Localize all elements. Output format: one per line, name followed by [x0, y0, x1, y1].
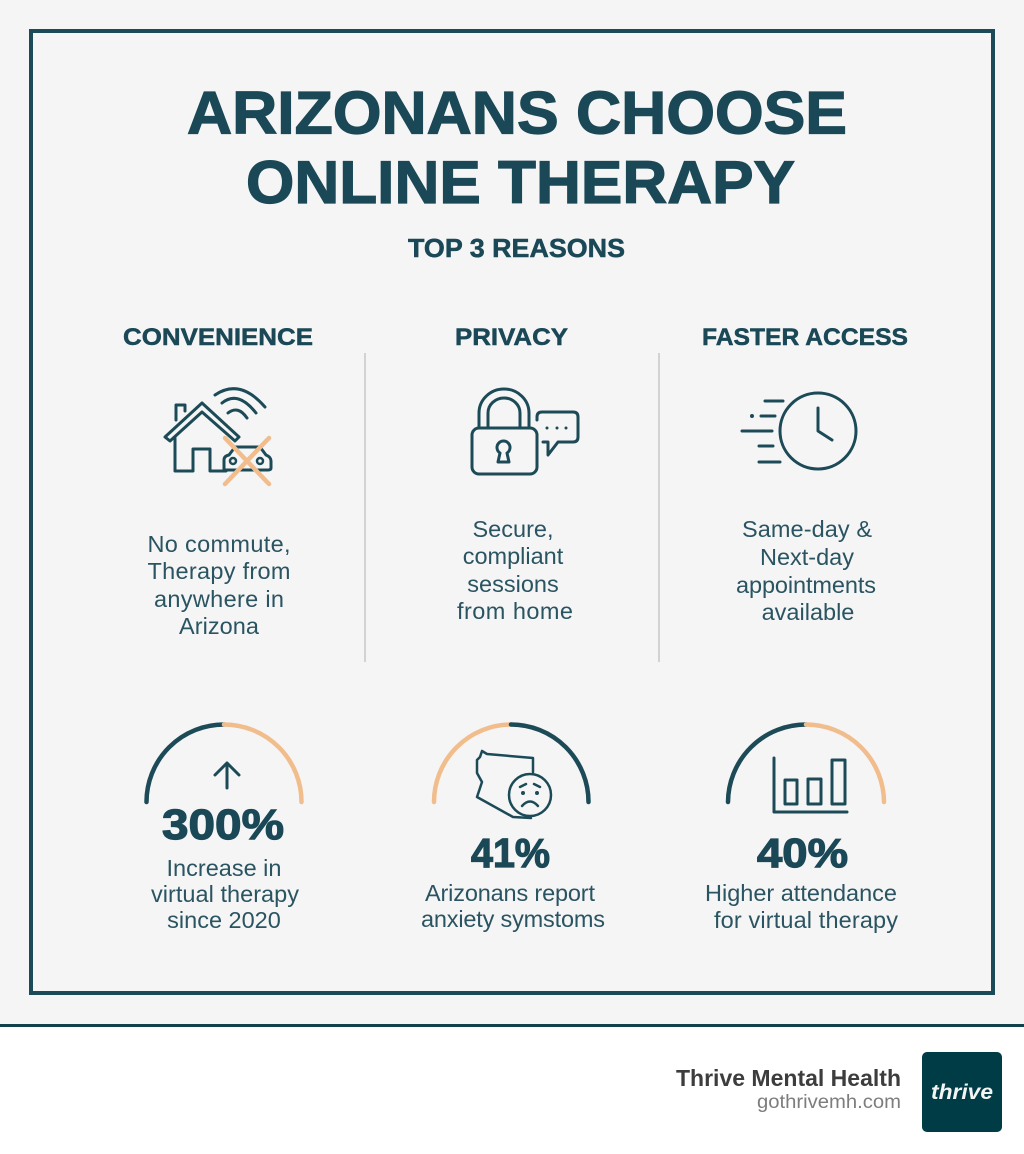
- title: [187, 80, 847, 216]
- text: privacy: from home: [457, 598, 573, 624]
- icon: bar chart: [774, 758, 847, 812]
- icon: Arizona map with sad face: [477, 751, 551, 818]
- text: 40%: [705, 880, 898, 933]
- text: convenience: Therapy from: [148, 558, 290, 584]
- footer brand text: gothrivemh.com: [757, 1092, 901, 1113]
- icon: padlock with speech bubble: [472, 389, 578, 474]
- subtitle: TOP 3 REASONS: [408, 233, 625, 263]
- panel: framed content: [31, 31, 993, 993]
- stat: 40%: [705, 724, 898, 933]
- text: 40%: Higher attendance: [705, 880, 897, 906]
- text: privacy: [457, 516, 573, 624]
- title: ARIZONANS CHOOSE: [187, 80, 847, 146]
- icon: up arrow: [215, 763, 239, 788]
- text: privacy: Secure,: [472, 516, 554, 542]
- text: faster access: available: [762, 599, 854, 625]
- panel: convenience: [123, 324, 313, 639]
- text: 41%: anxiety symstoms: [421, 906, 605, 932]
- value: 300%: 300%: [162, 801, 284, 849]
- icon: clock with speed lines: [742, 393, 856, 469]
- value: 41%: 41%: [471, 830, 550, 876]
- text: 40%: for virtual therapy: [714, 907, 898, 933]
- text: 300%: virtual therapy: [151, 881, 299, 907]
- text: convenience: [148, 531, 290, 639]
- text: faster access: appointments: [736, 572, 876, 598]
- stat: 300%: [146, 724, 302, 933]
- gauge: 41%: [434, 724, 588, 802]
- heading: privacy: PRIVACY: [455, 324, 568, 351]
- heading: faster access: FASTER ACCESS: [702, 324, 908, 351]
- text: faster access: Next-day: [760, 544, 854, 570]
- gauge: 300%: [146, 724, 302, 802]
- logo: [922, 1052, 1002, 1132]
- text: privacy: sessions: [467, 571, 559, 597]
- text: faster access: [736, 516, 876, 625]
- text: 41%: [421, 880, 605, 932]
- footer band: [0, 1024, 1024, 1154]
- panel: privacy: [455, 324, 578, 624]
- heading: convenience: CONVENIENCE: [123, 324, 313, 351]
- gauge: 40%: [728, 724, 884, 802]
- text: convenience: Arizona: [179, 613, 260, 639]
- stat: 41%: [421, 724, 605, 932]
- panel: faster access: [702, 324, 908, 625]
- text: 41%: Arizonans report: [425, 880, 595, 906]
- text: privacy: compliant: [463, 543, 564, 569]
- footer brand text: [676, 1065, 901, 1113]
- text: convenience: anywhere in: [154, 586, 284, 612]
- logo: thrive: [931, 1081, 993, 1104]
- text: 300%: since 2020: [167, 907, 281, 933]
- text: 300%: Increase in: [167, 855, 281, 881]
- text: faster access: Same-day &: [742, 516, 872, 542]
- value: 40%: 40%: [757, 830, 848, 876]
- title: ONLINE THERAPY: [246, 149, 795, 216]
- icon: house with wifi and crossed-out car: [165, 389, 271, 484]
- footer brand text: Thrive Mental Health: [676, 1065, 901, 1091]
- text: convenience: No commute,: [148, 531, 290, 557]
- text: 300%: [151, 855, 299, 933]
